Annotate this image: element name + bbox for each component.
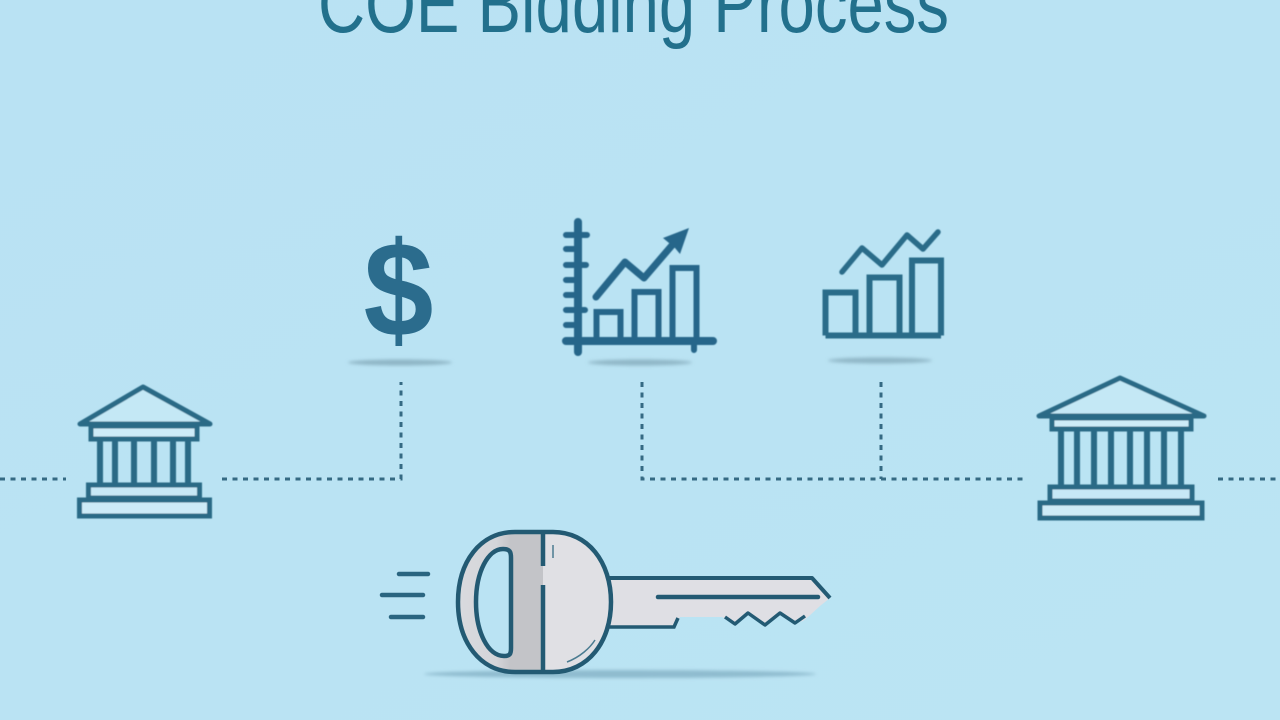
key hole (476, 549, 511, 656)
shadow: bar chart (588, 360, 692, 366)
key shadow (424, 670, 816, 678)
key blade (606, 578, 830, 627)
key head (458, 532, 611, 672)
motion lines (382, 574, 428, 617)
key divider (541, 532, 545, 672)
icon: right bank (1039, 378, 1204, 518)
icon: left bank (80, 387, 210, 516)
shadow: simple bar chart (828, 358, 932, 364)
icon: simple bar chart with trend line (826, 232, 941, 364)
icon: bar chart with rising arrow (566, 222, 713, 366)
shadow: dollar sign (348, 360, 452, 366)
icon: dollar sign (348, 214, 452, 366)
key highlights (553, 545, 595, 662)
icon: dollar sign: $ (364, 214, 433, 365)
icon: car key (382, 532, 830, 678)
dashed connector: left line to dollar icon (0, 382, 401, 479)
dashed connector: chart icons to right bank (642, 382, 1280, 479)
